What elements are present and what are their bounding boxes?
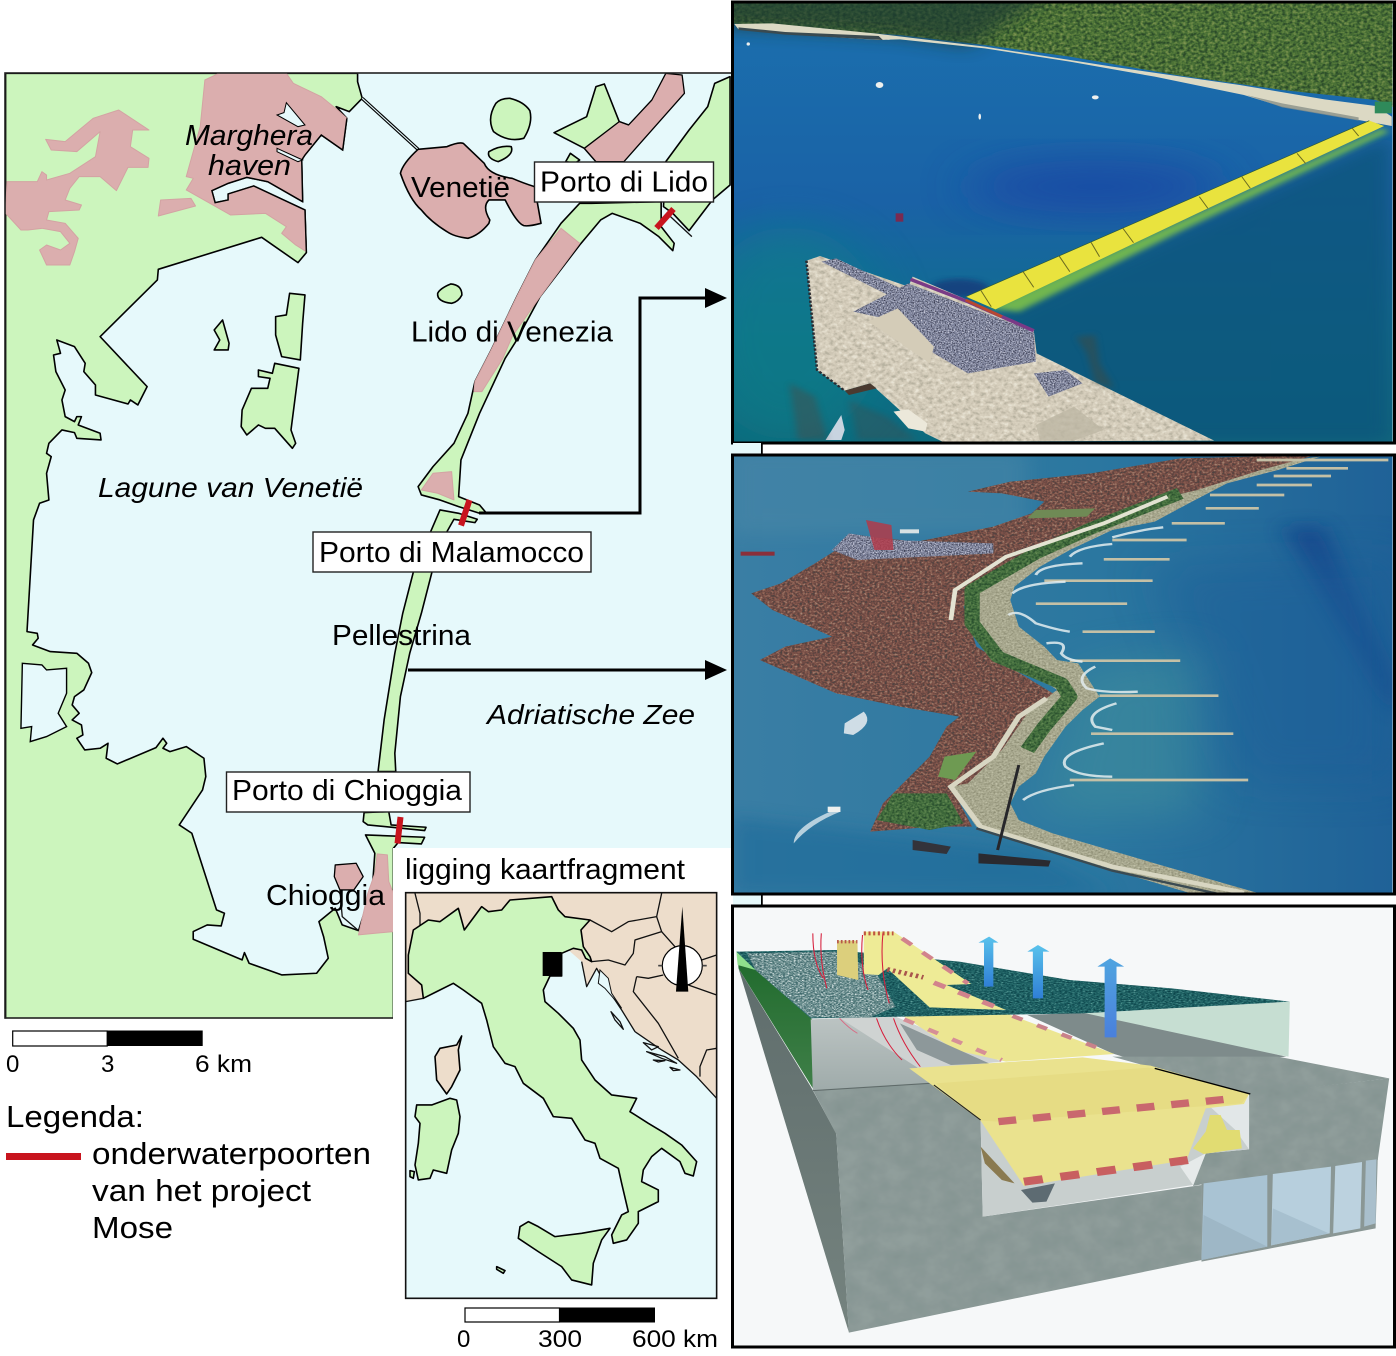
- legend: onderwaterpoorten: [92, 1136, 371, 1171]
- label box: Porto di Lido: Porto di Lido: [540, 166, 708, 198]
- small islands: [410, 1171, 505, 1273]
- construction building: [853, 283, 1036, 373]
- Corsica: [435, 1036, 462, 1094]
- boat wakes: [844, 712, 867, 735]
- water surface: [736, 950, 1290, 1018]
- blue rising arrows: [978, 937, 1124, 1037]
- red flow curves: [813, 933, 920, 1067]
- small boats: [747, 42, 1099, 120]
- beach: [734, 23, 1392, 126]
- scale bar main map: [6, 1030, 252, 1078]
- legend: Legenda:: [6, 1099, 144, 1134]
- inner chambers: [1201, 1159, 1376, 1260]
- photo: Pellestrina island with groynes: [734, 456, 1393, 892]
- industrial zone: [832, 533, 993, 560]
- scale bar inset: 0: [457, 1326, 470, 1353]
- arrow: Malamocco to photo of barrier: [479, 288, 727, 513]
- label box: Porto di Chioggia: Porto di Chioggia: [232, 775, 463, 807]
- chamber wall backing: [1201, 1158, 1378, 1262]
- legend: van het project: [92, 1173, 311, 1208]
- photo frame: barrier: [732, 2, 1394, 443]
- scale bar inset: 300: [538, 1326, 582, 1353]
- town: [751, 455, 1316, 832]
- Italy mainland: [408, 897, 697, 1243]
- main yellow gate: [909, 1057, 1250, 1186]
- upper left concrete slab: [811, 1017, 930, 1091]
- lower left top slab: [813, 1083, 983, 1134]
- right block front: [1193, 1078, 1389, 1186]
- water: [730, 0, 1396, 450]
- moored boat: [894, 409, 928, 432]
- label box: Porto di Malamocco: Porto di Malamocco: [319, 537, 584, 569]
- seawall road: [951, 497, 1167, 620]
- scale bar inset: [457, 1308, 718, 1353]
- Sardinia: [415, 1098, 460, 1180]
- label: Marghera haven: [185, 120, 313, 182]
- main map: lagoon of Venice: [5, 73, 762, 1027]
- label: Lido di Venezia: Lido di Venezia: [411, 316, 614, 348]
- surf arcs: [1008, 527, 1163, 800]
- right top slab: [1112, 1057, 1389, 1095]
- groynes: [1036, 460, 1388, 780]
- scale bar main map: 6 km: [195, 1051, 252, 1078]
- photo: floating barrier at Lido: [734, 4, 1393, 442]
- map gap ticks: [733, 443, 762, 905]
- upper concrete back: [1027, 1013, 1286, 1067]
- label: Chioggia: Chioggia: [266, 880, 386, 912]
- surface gates: [837, 932, 1006, 1010]
- label: Marghera haven: Marghera: [185, 120, 313, 152]
- arrow: Pellestrina to photo of island: [408, 660, 727, 680]
- yellow barrier: [966, 121, 1384, 309]
- beach: [951, 457, 1320, 894]
- label: Adriatische Zee: Adriatische Zee: [485, 699, 695, 730]
- frame: diagram: [732, 906, 1394, 1347]
- hinge: [1021, 1183, 1055, 1203]
- 3D diagram of MOSE gates: [734, 908, 1393, 1346]
- front concrete face: [836, 1120, 1201, 1333]
- Sicily: [518, 1222, 610, 1285]
- crane and barges: [978, 853, 1051, 867]
- label: Marghera haven: haven: [208, 150, 291, 182]
- left side of caisson: [736, 952, 849, 1333]
- pale water block at back: [1083, 1002, 1290, 1057]
- scale bar main map: 0: [6, 1051, 19, 1078]
- upper gate underwater: [900, 1013, 1114, 1065]
- white background behind inset: [393, 848, 733, 1356]
- barrier glow: [989, 128, 1389, 312]
- label: Lagune van Venetië: Lagune van Venetië: [98, 472, 363, 503]
- label: Pellestrina: Pellestrina: [332, 620, 472, 652]
- inset map: Italy: [406, 893, 717, 1298]
- forest: [730, 0, 1396, 108]
- red gate marker: Lido: [656, 209, 674, 228]
- red gate marker: Chioggia: [398, 817, 400, 844]
- label: Venetië: Venetië: [411, 172, 510, 204]
- seaweed: [1076, 335, 1114, 388]
- red gate marker: Malamocco: [461, 500, 470, 526]
- photo frame: Pellestrina: [732, 455, 1394, 894]
- compass: [658, 907, 707, 992]
- scale bar main map: 3: [101, 1051, 114, 1078]
- water: [730, 450, 1396, 900]
- gate recess: [981, 1097, 1249, 1217]
- map geometry: land, urban areas and islands: [6, 73, 730, 1027]
- legend: [6, 1099, 371, 1245]
- yellow machinery: [1193, 1115, 1242, 1154]
- location marker: [543, 952, 562, 976]
- inset heading: ligging kaartfragment: [405, 854, 685, 886]
- legend: Mose: [92, 1210, 173, 1245]
- scale bar inset: 600 km: [632, 1326, 718, 1353]
- borders of neighbouring countries: [406, 893, 717, 1098]
- green fields: [877, 793, 964, 830]
- platform: [806, 256, 1214, 442]
